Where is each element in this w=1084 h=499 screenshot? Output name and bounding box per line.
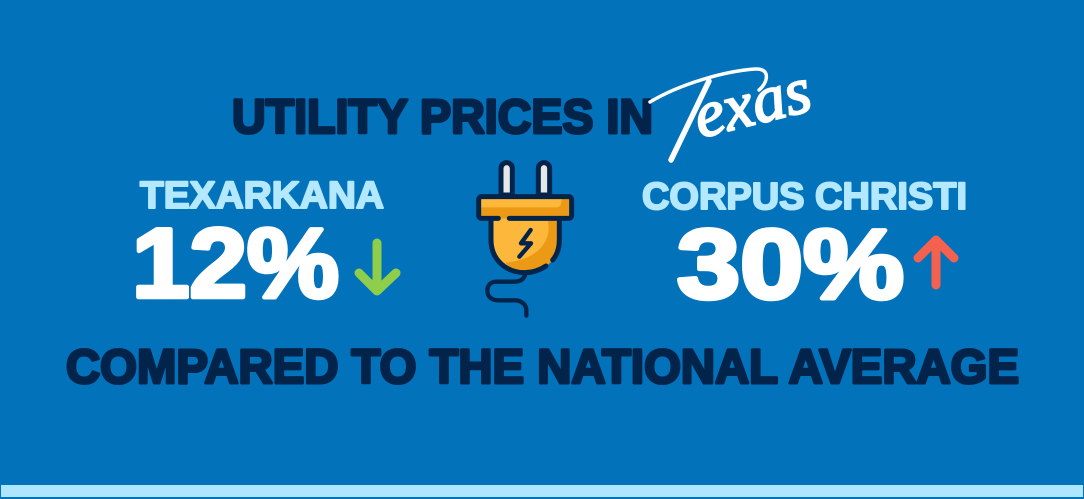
title script word: Texas: exas [686, 53, 818, 153]
lightning bolt [519, 230, 531, 257]
icon: electric plug [479, 163, 572, 316]
power cord [487, 275, 526, 316]
title [232, 53, 818, 160]
plug body outline [491, 218, 559, 273]
right statistic: Corpus Christi [642, 176, 967, 319]
plug body shade [505, 218, 559, 273]
plug body [491, 218, 559, 273]
title text: UTILITY PRICES IN [232, 91, 653, 144]
plug head shade [479, 197, 572, 218]
left statistic: Texarkana [132, 175, 396, 318]
subtitle: COMPARED TO THE NATIONAL AVERAGE [66, 341, 1019, 394]
plug head bar [479, 197, 572, 218]
bottom light blue band [1, 485, 1083, 497]
city label: TEXARKANA [140, 175, 384, 217]
plug prongs [501, 163, 550, 195]
icon: green down arrow [359, 243, 396, 291]
percentage: 30% [677, 209, 904, 319]
icon: red up arrow [918, 240, 954, 285]
percentage: 12% [132, 208, 339, 318]
city label: CORPUS CHRISTI [642, 176, 967, 218]
plug head outline [479, 197, 572, 218]
